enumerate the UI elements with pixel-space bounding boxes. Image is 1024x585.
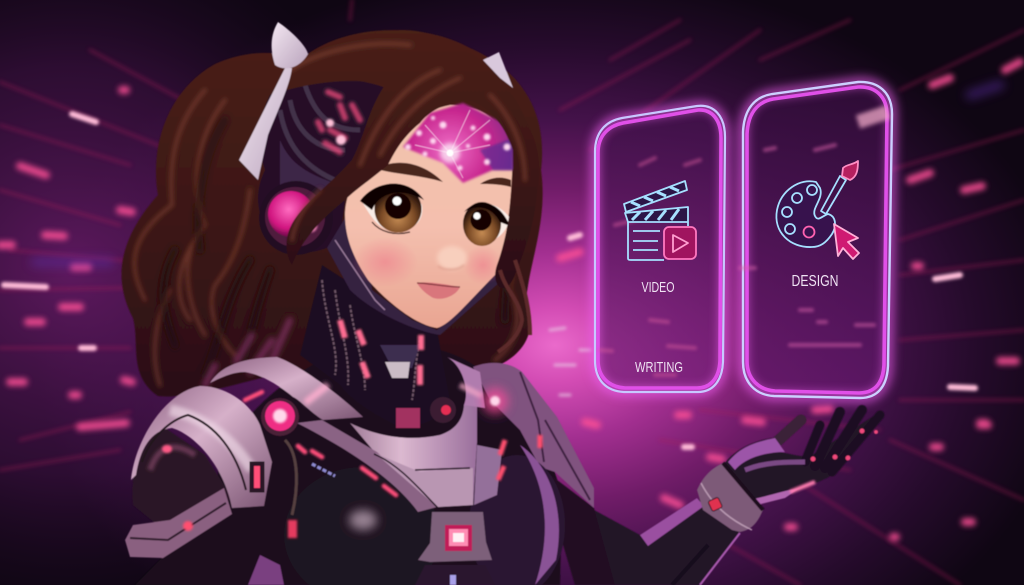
- headset: helmet panels: [258, 79, 500, 335]
- face: [345, 103, 513, 328]
- eye left: [360, 184, 424, 234]
- right bust: [469, 455, 565, 585]
- eye right: [463, 202, 510, 246]
- left pauldron inner: [132, 428, 232, 535]
- cheeks: [352, 237, 418, 287]
- left pauldron: [131, 386, 272, 508]
- icon: clapperboard: [624, 181, 696, 260]
- center emblem: [418, 512, 492, 562]
- upper strap: [210, 357, 363, 420]
- cable: [285, 440, 296, 515]
- right armor strip: [474, 445, 502, 505]
- robotic hand: [725, 410, 880, 505]
- diagonal strap: [297, 420, 437, 512]
- ribbon: left bow: [239, 22, 308, 180]
- hair: front swoop and crown: [270, 30, 539, 352]
- lower center circuit: [415, 565, 495, 585]
- mouth: [417, 282, 460, 299]
- hair: back mass: [122, 30, 543, 396]
- left bust: [284, 467, 440, 585]
- panel: writing and video card: [595, 106, 725, 392]
- left arm below pad: [135, 510, 262, 585]
- forearm: [585, 498, 740, 585]
- ear disc: [259, 181, 333, 255]
- nose: [437, 246, 467, 270]
- figure: cyborg girl: [122, 22, 880, 585]
- shoulder circle light: [261, 398, 299, 436]
- label: video: VIDEO: [642, 280, 674, 296]
- jaw armor: [327, 218, 500, 335]
- right shoulder armor: [473, 363, 594, 508]
- chest lights: [245, 392, 396, 495]
- torso and suit: [125, 350, 615, 585]
- chest plate: [350, 405, 477, 507]
- brain network forehead: [403, 103, 513, 183]
- label: writing: WRITING: [635, 360, 683, 376]
- ribbon: right bow: [483, 52, 513, 88]
- eyebrows: [376, 163, 443, 182]
- label: design: DESIGN: [792, 273, 838, 290]
- icon: paint palette and cursor: [776, 161, 859, 259]
- neck and cables: [300, 265, 456, 428]
- wrist cuff: [697, 463, 763, 532]
- panel: design card: [740, 82, 892, 398]
- left lower pad: [125, 488, 232, 558]
